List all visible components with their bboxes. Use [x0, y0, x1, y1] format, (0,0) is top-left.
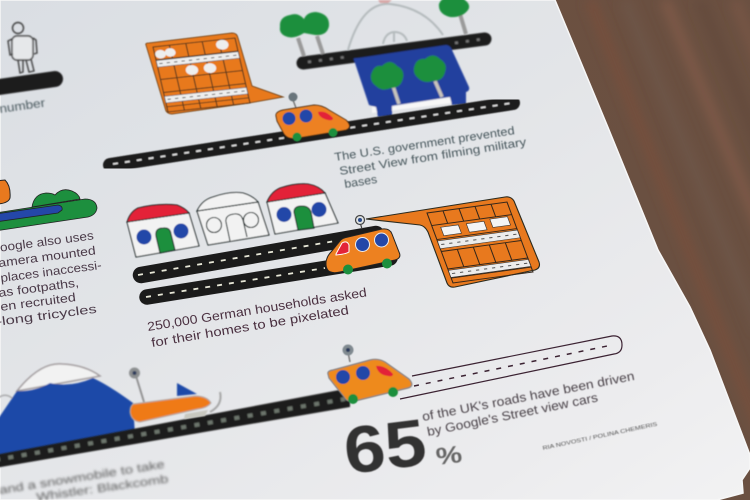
icon: blue military base building — [354, 45, 469, 117]
stat: 65%: 65 — [340, 404, 430, 488]
road: bottom black road — [0, 388, 350, 468]
text block: Google tricycles — [0, 228, 102, 330]
icon: bottom van — [328, 344, 412, 404]
caption: UK roads: of the UK's roads have been driven — [421, 369, 636, 424]
icon: radar dome — [348, 0, 443, 50]
icon: person figure — [8, 22, 37, 73]
caption: German households: for their homes to be pixelated — [150, 303, 350, 350]
road: double German road — [138, 234, 390, 297]
road: robot person stands on — [0, 79, 55, 88]
stat: 65%: % — [434, 441, 464, 471]
stat: 65% — [340, 404, 464, 488]
road: outlined unfinished road — [400, 336, 622, 399]
icon: first van with camera — [276, 92, 350, 142]
house: red roof right — [267, 184, 338, 234]
callout: map speech bubble with stars — [146, 33, 283, 114]
callout: map speech bubble with pixelated homes — [366, 197, 540, 287]
caption: U.S. government — [334, 125, 527, 191]
icon: trees above the road — [280, 0, 469, 56]
caption: snowmobile, out of focus — [0, 459, 169, 500]
road: upper base road — [303, 39, 485, 63]
icon: snowmobile with camera — [129, 368, 221, 422]
credit: RIA NOVOSTI / POLINA CHEMERIS — [542, 422, 658, 452]
group: top row illustrations — [0, 0, 485, 117]
house: red roof left — [127, 204, 199, 257]
caption: U.S. government: The U.S. government prevented — [334, 125, 515, 164]
caption: German households — [146, 285, 368, 350]
icon: house row — [127, 184, 338, 257]
house: uncoloured centre — [197, 192, 269, 245]
icon: green island with blue strip — [0, 180, 97, 231]
caption: UK roads — [421, 369, 636, 439]
caption: U.S. government: Street View from filming military — [339, 136, 527, 178]
caption: U.S. government: bases — [344, 174, 378, 191]
caption: UK roads: by Google's Street view cars — [426, 391, 599, 439]
icon: blue snowy mountain — [0, 364, 135, 460]
caption: snowmobile, out of focus: and a snowmobile to take — [0, 459, 165, 497]
caption: German households: 250,000 German households asked — [146, 285, 368, 334]
road: main road under the first van — [110, 103, 513, 165]
icon: German van facing left — [326, 216, 400, 274]
